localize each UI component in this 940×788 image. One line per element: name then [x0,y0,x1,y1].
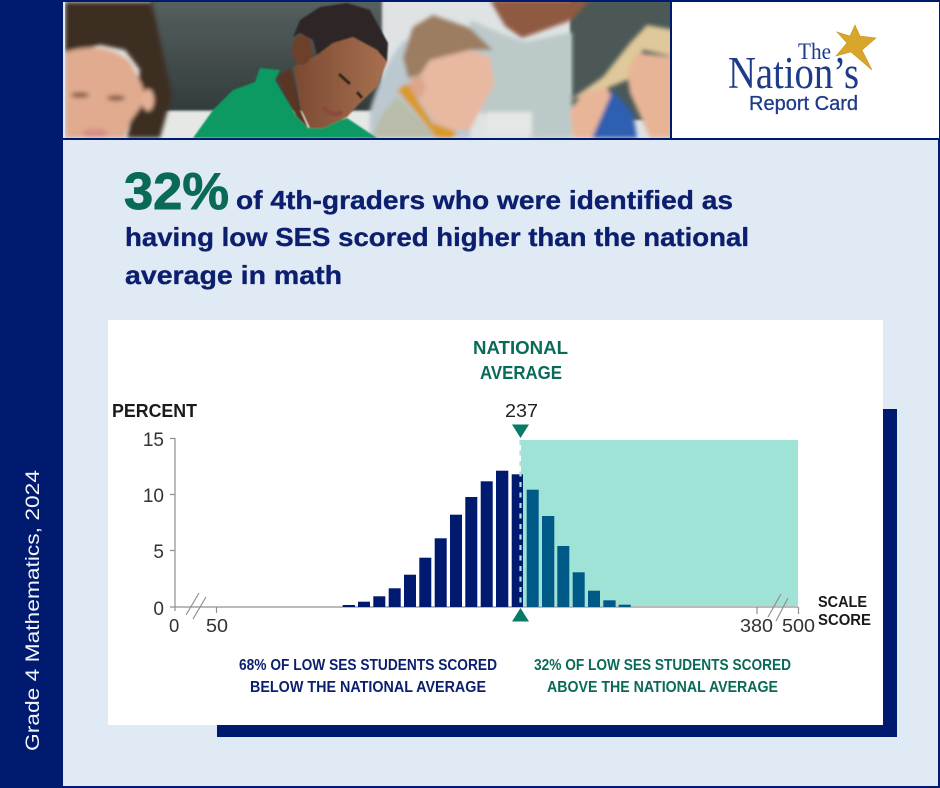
axes [170,438,798,621]
wall shading [370,40,470,138]
x axis title: SCALE [818,594,867,611]
histogram bars below average [343,471,523,607]
y axis labels: 15 [143,430,164,451]
y axis labels: 5 [153,542,164,563]
x axis title: SCORE [818,612,871,629]
headline: having low SES scored higher than the national [125,222,749,252]
panel divider and logo box [670,2,939,138]
x axis labels [169,615,815,636]
left girl hair and face [65,2,172,138]
caption below average [239,657,497,696]
histogram bars above average [527,490,631,607]
above-average shaded region [521,440,798,606]
marker triangle bottom [512,608,529,622]
headline: of 4th-graders who were identified as [236,185,733,215]
headline [124,163,749,290]
icon: gold star [836,25,876,70]
national average label [473,338,568,383]
photo banner: children at desks [65,0,675,142]
boy face [293,37,387,128]
chart card [108,320,883,725]
y axis labels: 10 [143,486,164,507]
caption below average: BELOW THE NATIONAL AVERAGE [250,679,486,696]
y axis title: PERCENT [112,401,197,421]
teacher [470,20,572,138]
histogram chart [112,338,871,636]
navy offset shadow panel [217,409,897,737]
headline: average in math [125,260,342,290]
y axis labels [143,430,164,620]
caption above average: ABOVE THE NATIONAL AVERAGE [547,679,778,696]
caption above average [534,657,791,696]
national average value: 237 [505,400,538,421]
logo: The Nation's Report Card: The [798,39,831,64]
x axis title [818,594,871,629]
caption below average: 68% OF LOW SES STUDENTS SCORED [239,657,497,674]
national average label: AVERAGE [480,363,562,383]
logo: The Nation's Report Card [728,25,876,115]
logo: The Nation's Report Card: Report Card [749,93,858,115]
blond boy hair and face [403,15,493,78]
marker triangle top [512,424,529,438]
boy hair [293,3,388,62]
logo: The Nation's Report Card: Nation’s [728,48,859,98]
x axis labels: 380 [740,615,773,636]
caption above average: 32% OF LOW SES STUDENTS SCORED [534,657,791,674]
boy green shirt [193,68,377,138]
left sidebar [0,0,63,788]
x axis labels: 500 [782,615,815,636]
y axis labels: 0 [153,599,164,620]
national average label: NATIONAL [473,338,568,358]
right girl hair, arm, face [570,25,675,100]
sidebar label: Grade 4 Mathematics, 2024 [22,470,44,751]
x axis labels: 50 [206,615,228,636]
headline statistic: 32% [124,163,229,221]
x axis labels: 0 [169,615,179,636]
national average marker line [519,440,522,607]
